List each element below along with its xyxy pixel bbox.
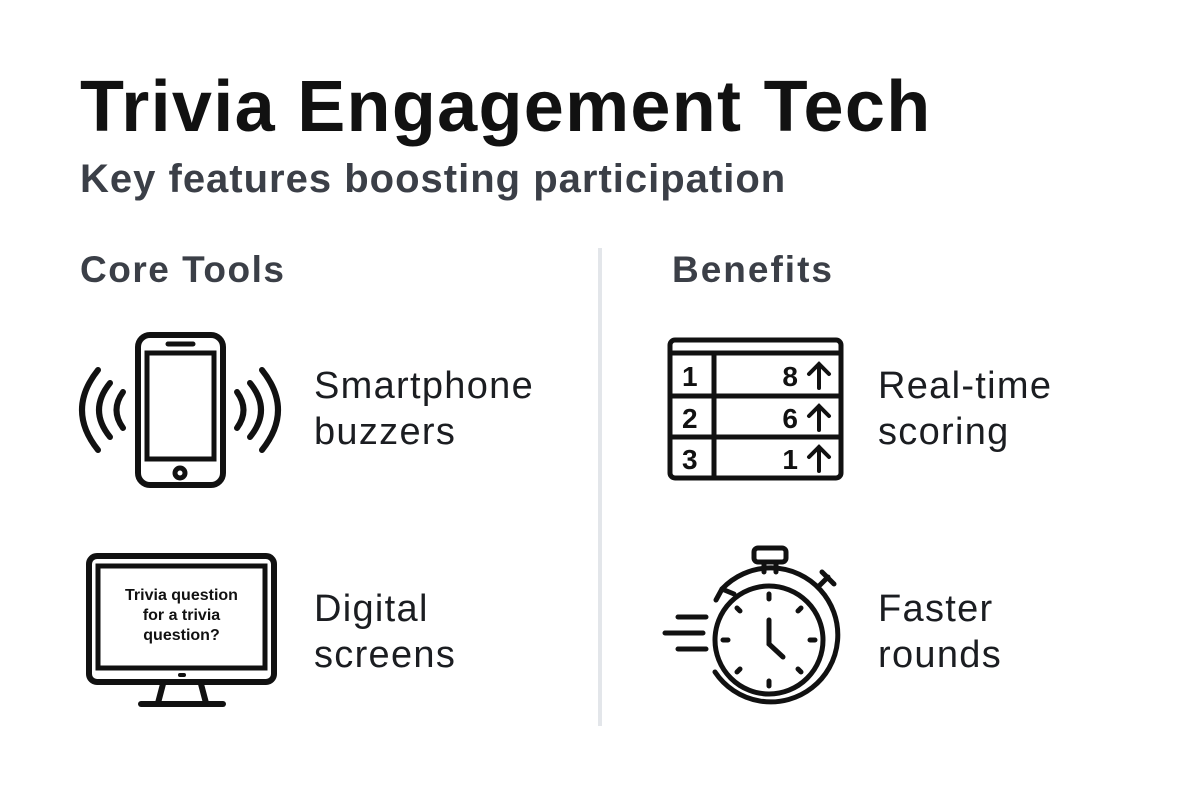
icon: scoreboard: 2: [682, 403, 698, 434]
label: faster rounds: [878, 588, 1002, 676]
heading: core tools: Core Tools: [80, 249, 286, 290]
icon: digital screen: for a trivia: [143, 607, 220, 624]
icon: scoreboard: 1: [782, 444, 798, 475]
icon: scoreboard: 6: [782, 403, 798, 434]
heading: benefits: Benefits: [672, 249, 834, 290]
icon: digital screen: Trivia question: [125, 587, 238, 604]
icon: stopwatch: [662, 546, 840, 704]
icon: smartphone buzzer: [78, 332, 282, 488]
label: real-time scoring: scoring: [878, 411, 1010, 453]
label: digital screens: Digital: [314, 588, 429, 630]
label: digital screens: screens: [314, 634, 456, 676]
label: faster rounds: rounds: [878, 634, 1002, 676]
icon: scoreboard: 3: [682, 444, 698, 475]
label: smartphone buzzers: [314, 365, 534, 453]
icon: scoreboard: 8: [782, 361, 798, 392]
icon: scoreboard: [668, 338, 844, 480]
label: real-time scoring: [878, 365, 1052, 453]
title: Trivia Engagement Tech: [80, 67, 932, 147]
label: faster rounds: Faster: [878, 588, 994, 630]
icon: digital screen: question?: [143, 627, 220, 644]
label: real-time scoring: Real-time: [878, 365, 1052, 407]
label: digital screens: [314, 588, 456, 676]
label: smartphone buzzers: Smartphone: [314, 365, 534, 407]
label: smartphone buzzers: buzzers: [314, 411, 456, 453]
subtitle: Key features boosting participation: [80, 157, 786, 201]
icon: scoreboard: 1: [682, 361, 698, 392]
icon: digital screen: [86, 553, 277, 707]
divider: [598, 248, 602, 726]
